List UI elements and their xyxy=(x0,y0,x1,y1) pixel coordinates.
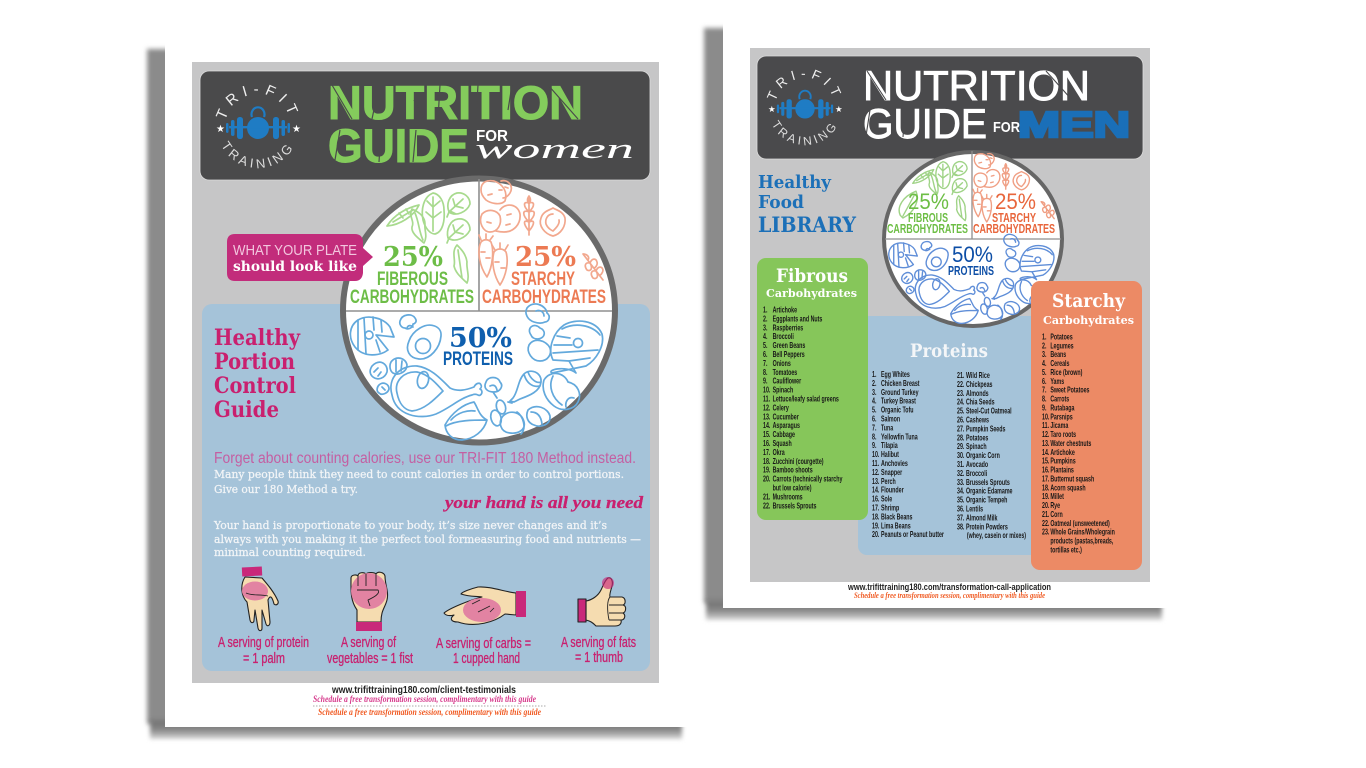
list: proteins column two: 21. xyxy=(957,372,964,380)
list: fibrous foods: but low calorie) xyxy=(773,485,811,493)
panel: grey sheet xyxy=(192,62,659,683)
list: proteins column one: Salmon xyxy=(881,416,900,424)
list: starchy foods: 11. xyxy=(1042,422,1049,431)
list: proteins column two: Chia Seeds xyxy=(966,399,995,407)
list: starchy foods: 3. xyxy=(1042,351,1046,360)
list: starchy foods: 7. xyxy=(1042,387,1046,395)
list: starchy foods: 22. xyxy=(1042,520,1049,528)
panel: grey sheet xyxy=(750,48,1150,582)
list: proteins column one: 3. xyxy=(872,389,876,397)
list: starchy foods: 2. xyxy=(1042,342,1046,351)
list: proteins column two: 31. xyxy=(957,461,964,469)
callout: what your plate should look like: WHAT YOUR PLATE xyxy=(233,242,357,259)
list: starchy foods: Rice (brown) xyxy=(1050,369,1082,377)
list: proteins column one xyxy=(872,371,944,540)
list: fibrous foods: 3. xyxy=(763,324,767,333)
title: Nutrition Guide for women: women xyxy=(475,134,634,165)
list: proteins column two: Pumpkin Seeds xyxy=(966,425,1006,434)
list: proteins column one: 16. xyxy=(872,496,879,504)
list: starchy foods: Sweet Potatoes xyxy=(1050,387,1090,395)
page: women's guide xyxy=(144,46,685,741)
list: proteins column two: 22. xyxy=(957,381,964,389)
footer: women's guide links: www.trifittraining180.com/client-testimonials xyxy=(331,684,516,696)
icons: starchy foods xyxy=(973,154,1054,222)
heading: healthy portion control guide: Guide xyxy=(214,397,279,423)
list: fibrous foods: Okra xyxy=(773,449,785,457)
footer: men's guide links: www.trifittraining180.com/transformation-call-application xyxy=(847,582,1051,593)
logo: Tri-Fit Training: ★ xyxy=(768,105,776,115)
list: fibrous foods: 20. xyxy=(763,476,770,484)
list: proteins column one: 2. xyxy=(872,380,876,388)
label: proteins: PROTEINS xyxy=(443,349,513,370)
title: Nutrition Guide for women: NUTRITION xyxy=(328,76,583,129)
list: starchy foods: Pumpkins xyxy=(1050,458,1076,466)
text block: hand explanation: Your hand is proportionate to your body, it’s size never changes and it’s xyxy=(213,518,607,532)
title: Nutrition Guide for women xyxy=(328,76,634,172)
label: proteins: 50% xyxy=(952,242,993,267)
label: fibrous: FIBEROUS xyxy=(377,269,448,290)
logo: Tri-Fit Training: TRAINING xyxy=(773,120,836,146)
list: starchy foods: 14. xyxy=(1042,449,1049,457)
list: proteins column two: 25. xyxy=(957,408,964,416)
list: proteins column one: Lima Beans xyxy=(881,522,911,531)
page: men's guide xyxy=(700,24,1165,622)
list: proteins column one: Egg Whites xyxy=(881,371,910,379)
list: fibrous foods: 17. xyxy=(763,449,770,457)
list: proteins column two: Brussels Sprouts xyxy=(966,479,1010,487)
list: proteins column two: Organic Edamame xyxy=(966,488,1013,496)
label: proteins: PROTEINS xyxy=(948,263,994,278)
list: proteins column two: 33. xyxy=(957,479,964,487)
list: proteins column two: 28. xyxy=(957,434,964,443)
list: fibrous foods: 19. xyxy=(763,467,770,475)
text block: hand explanation: minimal counting required. xyxy=(214,545,366,559)
list: starchy foods: 15. xyxy=(1042,458,1049,466)
list: starchy foods: Rye xyxy=(1050,502,1060,510)
captions: serving sizes: A serving of protein xyxy=(218,635,309,651)
list: fibrous foods: 10. xyxy=(763,387,770,395)
list: proteins column two: 35. xyxy=(957,497,964,505)
panel: proteins: Proteins xyxy=(910,341,988,362)
label: starchy xyxy=(973,189,1055,236)
panel: header xyxy=(756,56,1144,160)
list: fibrous foods: Bamboo shoots xyxy=(773,467,813,475)
list: fibrous foods: Raspberries xyxy=(773,324,803,333)
list: proteins column two: Organic Tempeh xyxy=(966,497,1007,505)
heading: healthy food library: LIBRARY xyxy=(758,212,857,237)
captions: serving sizes: A serving of fats xyxy=(561,635,636,651)
footer: men's guide links xyxy=(847,582,1051,600)
panel: proteins xyxy=(858,316,1043,555)
heading: healthy portion control guide: Portion xyxy=(214,349,295,375)
text block: introduction: Forget about counting calories, use our TRI-FIT 180 Method instead. xyxy=(214,450,636,467)
captions: serving sizes xyxy=(218,635,636,667)
list: fibrous foods: 11. xyxy=(763,396,770,404)
label: starchy: CARBOHYDRATES xyxy=(482,287,606,308)
icons: fibrous vegetables xyxy=(899,162,967,221)
list: starchy foods: Jicama xyxy=(1050,422,1068,431)
list: proteins column two: Broccoli xyxy=(966,470,987,478)
list: proteins column two: Spinach xyxy=(966,443,987,452)
label: starchy: 25% xyxy=(515,242,576,273)
list: proteins column two: 36. xyxy=(957,506,964,514)
list: fibrous foods: Cucumber xyxy=(773,413,799,422)
list: starchy foods: tortillas etc.) xyxy=(1050,546,1082,555)
list: fibrous foods: 6. xyxy=(763,351,767,359)
heading: healthy food library: Healthy xyxy=(758,172,831,193)
icon: cupped hand xyxy=(444,587,526,624)
list: proteins column one: Flounder xyxy=(881,487,904,495)
list: starchy foods: Millet xyxy=(1050,493,1064,502)
list: proteins column two: Lentils xyxy=(966,506,983,514)
captions: serving sizes: = 1 palm xyxy=(243,651,285,667)
list: proteins column one: Peanuts or Peanut butter xyxy=(881,531,944,540)
list: starchy foods: Water chestnuts xyxy=(1050,440,1091,448)
label: fibrous xyxy=(887,189,968,236)
footer: women's guide links xyxy=(313,684,546,717)
list: starchy foods: 21. xyxy=(1042,511,1049,519)
list: starchy foods: 9. xyxy=(1042,405,1046,413)
panel: fibrous carbohydrates: Carbohydrates xyxy=(766,286,857,300)
title: Nutrition Guide for women: FOR xyxy=(476,128,508,145)
list: starchy foods: Corn xyxy=(1050,511,1063,519)
list: proteins column two: Avocado xyxy=(966,461,988,469)
icons: proteins xyxy=(889,234,1054,323)
panel: portion control xyxy=(202,304,650,671)
list: fibrous foods: Lettuce/leafy salad greens xyxy=(773,396,839,404)
logo: Tri-Fit Training: TRAINING xyxy=(222,140,292,168)
list: fibrous foods: Spinach xyxy=(773,387,793,395)
list: starchy foods: 23. xyxy=(1042,529,1049,537)
list: proteins column one: 20. xyxy=(872,531,879,540)
list: starchy foods: 20. xyxy=(1042,502,1049,510)
label: fibrous: 25% xyxy=(383,242,443,273)
list: proteins column two: 38. xyxy=(957,523,964,532)
panel: starchy carbohydrates: Carbohydrates xyxy=(1043,313,1134,327)
list: fibrous foods: Artichoke xyxy=(773,307,797,315)
list: fibrous foods: 13. xyxy=(763,413,770,422)
captions: serving sizes: 1 cupped hand xyxy=(453,651,520,667)
text block: introduction: Many people think they need to count calories in order to control portions. xyxy=(214,467,624,481)
list: fibrous foods: Asparagus xyxy=(773,422,800,431)
list: fibrous foods: 1. xyxy=(763,307,767,315)
list: starchy foods: 6. xyxy=(1042,378,1046,386)
label: starchy: STARCHY xyxy=(992,210,1036,225)
list: fibrous foods: Cabbage xyxy=(773,431,795,439)
heading: healthy food library: Food xyxy=(758,192,804,213)
list: starchy foods: 8. xyxy=(1042,396,1046,404)
logo: Tri-Fit Training: ★ xyxy=(835,105,843,115)
list: fibrous foods: 15. xyxy=(763,431,770,439)
list: proteins column two: 23. xyxy=(957,390,964,398)
list: starchy foods: 5. xyxy=(1042,369,1046,377)
title: Nutrition Guide for men: NUTRITION xyxy=(863,62,1090,109)
list: fibrous foods: Mushrooms xyxy=(773,493,803,502)
list: proteins column two: (whey, casein or mixes) xyxy=(967,532,1026,541)
list: proteins column one: 9. xyxy=(872,442,876,451)
chart: plate diagram xyxy=(884,151,1062,326)
list: fibrous foods: 4. xyxy=(763,333,767,342)
title: Nutrition Guide for men: MEN xyxy=(1018,104,1130,145)
list: starchy foods: Whole Grains/Wholegrain xyxy=(1050,529,1115,537)
label: fibrous: CARBOHYDRATES xyxy=(887,222,968,236)
list: starchy foods: Yams xyxy=(1050,378,1064,386)
list: proteins column two: Almond Milk xyxy=(966,514,998,523)
list: fibrous foods: Broccoli xyxy=(773,333,794,342)
list: starchy foods: 1. xyxy=(1042,334,1046,342)
list: starchy foods: 12. xyxy=(1042,431,1049,439)
heading: healthy food library xyxy=(758,172,857,237)
list: proteins column one: Chicken Breast xyxy=(881,380,920,388)
list: starchy foods: Taro roots xyxy=(1050,431,1076,439)
captions: serving sizes: vegetables = 1 fist xyxy=(327,651,413,667)
title: Nutrition Guide for men: FOR xyxy=(993,119,1020,136)
list: fibrous foods: 2. xyxy=(763,315,767,324)
list: proteins column one: 7. xyxy=(872,424,876,433)
label: proteins xyxy=(443,323,513,370)
list: fibrous foods: 22. xyxy=(763,502,770,511)
footer: women's guide links: Schedule a free transformation session, complimentary with this guide xyxy=(313,694,536,704)
label: proteins: 50% xyxy=(449,323,512,354)
list: proteins column one: 13. xyxy=(872,478,879,486)
list: proteins column one: Anchovies xyxy=(881,460,908,468)
list: fibrous foods: Squash xyxy=(773,440,792,448)
list: proteins column two: 24. xyxy=(957,399,964,407)
list: fibrous foods: Carrots (technically starchy xyxy=(773,476,843,484)
text: your hand is all you need: your hand is all you need xyxy=(443,493,644,512)
list: fibrous foods: 12. xyxy=(763,404,770,413)
label: fibrous: CARBOHYDRATES xyxy=(350,287,474,308)
list: proteins column one: 11. xyxy=(872,460,879,468)
list: proteins column one: 6. xyxy=(872,416,876,424)
list: proteins column one: Ground Turkey xyxy=(881,389,919,397)
footer: men's guide links: Schedule a free transformation session, complimentary with this guide xyxy=(854,591,1045,600)
captions: serving sizes: = 1 thumb xyxy=(575,650,623,666)
panel: starchy carbohydrates xyxy=(1031,281,1142,570)
list: proteins column two: Chickpeas xyxy=(966,381,993,389)
list: proteins column one: 10. xyxy=(872,451,879,459)
list: proteins column one: 14. xyxy=(872,487,879,495)
list: starchy foods: Parsnips xyxy=(1050,413,1073,422)
list: fibrous foods xyxy=(763,307,843,511)
captions: serving sizes: A serving of carbs = xyxy=(436,636,531,652)
label: fibrous: FIBROUS xyxy=(908,210,948,225)
list: fibrous foods: 21. xyxy=(763,493,770,502)
list: proteins column one: 8. xyxy=(872,433,876,442)
label: starchy: 25% xyxy=(995,189,1036,214)
list: proteins column two: 30. xyxy=(957,452,964,460)
list: proteins column two: Wild Rice xyxy=(966,372,990,380)
list: proteins column one: Snapper xyxy=(881,469,902,477)
callout: what your plate should look like: should look like xyxy=(233,259,357,275)
list: proteins column two: 26. xyxy=(957,417,964,425)
label: fibrous: 25% xyxy=(908,189,949,214)
list: proteins column one: 4. xyxy=(872,398,876,406)
list: starchy foods: 19. xyxy=(1042,493,1049,502)
list: starchy foods: Legumes xyxy=(1050,342,1074,351)
list: proteins column one: Shrimp xyxy=(881,505,899,513)
list: fibrous foods: Tomatoes xyxy=(773,369,797,377)
list: proteins column two: Organic Corn xyxy=(966,452,1000,460)
list: proteins column two: 29. xyxy=(957,443,964,452)
label: fibrous xyxy=(350,242,474,308)
list: proteins column one: Halibut xyxy=(881,451,899,459)
list: starchy foods: Oatmeal (unsweetened) xyxy=(1050,520,1110,528)
callout: what your plate should look like xyxy=(227,234,373,281)
heading: healthy portion control guide: Healthy xyxy=(214,325,301,351)
list: proteins column one: Yellowfin Tuna xyxy=(881,433,918,442)
list: proteins column one: Sole xyxy=(881,496,892,504)
list: fibrous foods: 5. xyxy=(763,342,767,350)
icon: palm xyxy=(242,566,278,631)
list: proteins column one: Tilapia xyxy=(881,442,898,451)
list: fibrous foods: Eggplants and Nuts xyxy=(773,315,822,324)
list: proteins column one: Turkey Breast xyxy=(881,398,916,406)
icon: thumb xyxy=(578,577,626,626)
chart: plate diagram xyxy=(343,178,615,442)
text block: hand explanation: always with you making it the perfect tool formeasuring food and nutrients — xyxy=(214,532,641,546)
icons: proteins xyxy=(350,304,603,440)
list: proteins column one: Organic Tofu xyxy=(881,407,914,415)
list: proteins column one: 12. xyxy=(872,469,879,477)
list: fibrous foods: Onions xyxy=(773,360,791,368)
list: starchy foods xyxy=(1042,334,1115,555)
list: starchy foods: Carrots xyxy=(1050,396,1069,404)
list: starchy foods: 16. xyxy=(1042,467,1049,475)
text block: introduction xyxy=(214,450,636,496)
icon: fist xyxy=(351,572,388,631)
list: starchy foods: Rutabaga xyxy=(1050,405,1075,413)
title: Nutrition Guide for men xyxy=(863,62,1130,147)
list: fibrous foods: Bell Peppers xyxy=(773,351,805,359)
heading: healthy portion control guide xyxy=(214,325,301,423)
list: proteins column one: 1. xyxy=(872,371,876,379)
list: starchy foods: 18. xyxy=(1042,484,1049,493)
heading: healthy portion control guide: Control xyxy=(214,373,296,399)
list: starchy foods: Cereals xyxy=(1050,360,1070,368)
list: proteins column one: Tuna xyxy=(881,424,893,433)
list: starchy foods: 13. xyxy=(1042,440,1049,448)
label: starchy xyxy=(482,242,606,308)
icons: starchy foods xyxy=(479,181,603,285)
list: starchy foods: 4. xyxy=(1042,360,1046,368)
logo: Tri-Fit Training: TRI-FIT xyxy=(216,84,298,117)
title: Nutrition Guide for men: GUIDE xyxy=(863,100,987,147)
list: proteins column two: Almonds xyxy=(966,390,989,398)
list: starchy foods: Plantains xyxy=(1050,467,1074,475)
list: proteins column one: 19. xyxy=(872,522,879,531)
logo: Tri-Fit Training: ★ xyxy=(292,124,301,135)
list: starchy foods: 10. xyxy=(1042,413,1049,422)
list: fibrous foods: Zucchini (courgette) xyxy=(773,458,824,466)
list: starchy foods: 17. xyxy=(1042,475,1049,484)
list: starchy foods: Acorn squash xyxy=(1050,484,1086,493)
list: fibrous foods: 14. xyxy=(763,422,770,431)
list: fibrous foods: 7. xyxy=(763,360,767,368)
text block: introduction: Give our 180 Method a try. xyxy=(214,482,358,496)
list: proteins column one: 18. xyxy=(872,513,879,522)
list: proteins column one: Perch xyxy=(881,478,896,486)
logo: Tri-Fit Training xyxy=(766,70,843,146)
text block: hand explanation xyxy=(213,518,641,559)
list: proteins column two: Potatoes xyxy=(966,434,988,443)
list: fibrous foods: 16. xyxy=(763,440,770,448)
captions: serving sizes: A serving of xyxy=(341,635,397,651)
label: proteins xyxy=(948,242,994,278)
title: Nutrition Guide for women: GUIDE xyxy=(328,119,469,172)
list: starchy foods: Beans xyxy=(1050,351,1066,360)
list: fibrous foods: 18. xyxy=(763,458,770,466)
list: proteins column one: 17. xyxy=(872,505,879,513)
panel: fibrous carbohydrates: Fibrous xyxy=(776,266,848,287)
logo: Tri-Fit Training: ★ xyxy=(216,124,225,135)
list: fibrous foods: Brussels Sprouts xyxy=(773,502,817,511)
list: proteins column two: Protein Powders xyxy=(966,523,1008,532)
list: starchy foods: Potatoes xyxy=(1050,334,1073,342)
list: fibrous foods: 9. xyxy=(763,378,767,386)
list: proteins column two: 37. xyxy=(957,514,964,523)
icons: fibrous vegetables xyxy=(387,193,470,283)
list: proteins column two xyxy=(957,372,1026,541)
logo: Tri-Fit Training: TRI-FIT xyxy=(766,70,842,98)
list: proteins column one: 5. xyxy=(872,407,876,415)
list: starchy foods: Butternut squash xyxy=(1050,475,1094,484)
list: proteins column two: 34. xyxy=(957,488,964,496)
label: starchy: CARBOHYDRATES xyxy=(973,222,1055,236)
list: starchy foods: products (pastas,breads, xyxy=(1050,538,1113,546)
list: proteins column two: 27. xyxy=(957,425,964,434)
label: starchy: STARCHY xyxy=(511,269,575,290)
panel: header xyxy=(200,70,650,180)
list: starchy foods: Artichoke xyxy=(1050,449,1075,457)
list: proteins column two: Steel-Cut Oatmeal xyxy=(966,408,1012,416)
list: proteins column one: Black Beans xyxy=(881,513,913,522)
footer: women's guide links: Schedule a free transformation session, complimentary with this guide xyxy=(318,707,541,717)
list: fibrous foods: Green Beans xyxy=(773,342,805,350)
list: proteins column two: 32. xyxy=(957,470,964,478)
list: fibrous foods: Celery xyxy=(773,404,789,413)
panel: fibrous carbohydrates xyxy=(757,258,868,520)
panel: starchy carbohydrates: Starchy xyxy=(1052,291,1126,312)
list: fibrous foods: Cauliflower xyxy=(773,378,801,386)
list: proteins column two: Cashews xyxy=(966,417,989,425)
list: fibrous foods: 8. xyxy=(763,369,767,377)
logo: Tri-Fit Training xyxy=(216,84,301,168)
